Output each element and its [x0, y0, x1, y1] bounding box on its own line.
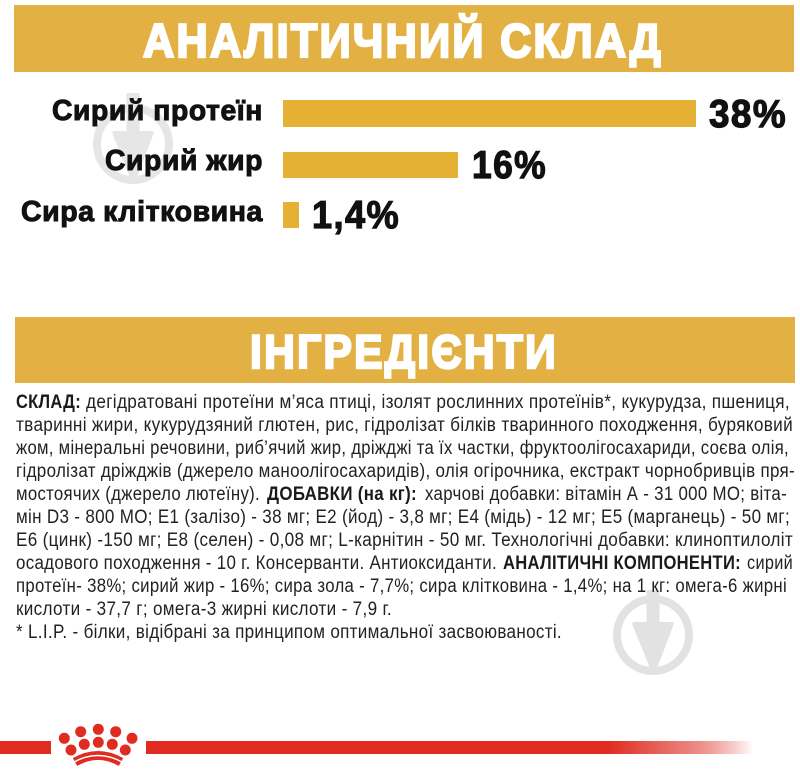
bar row: crude protein: 38% — [709, 93, 787, 136]
bar row: crude protein — [52, 93, 787, 136]
text block: ingredients list: мостоячих (джерело лютеїну). — [16, 484, 260, 505]
text block: ingredients list: ДОБАВКИ (на кг): — [267, 484, 417, 505]
heading banner: ingredients — [15, 317, 795, 383]
bar row: crude fibre: Сира клітковина — [21, 196, 263, 228]
bar row: crude fat — [105, 144, 547, 187]
heading banner: analytical composition — [14, 5, 794, 72]
bar row: crude fibre — [21, 194, 400, 237]
text block: ingredients list: АНАЛІТИЧНІ КОМПОНЕНТИ: — [503, 553, 741, 574]
bar row: crude protein: Сирий протеїн — [52, 95, 263, 127]
text block: ingredients list: сирий — [747, 553, 793, 574]
text block: ingredients list — [16, 392, 795, 643]
bar row: crude fat: 16% — [472, 144, 547, 187]
heading banner: ingredients: ІНГРЕДІЄНТИ — [250, 325, 558, 378]
bar row: crude fibre: 1,4% — [312, 194, 400, 237]
icon: royal crown logo — [59, 724, 138, 762]
text block: ingredients list: * L.I.P. - білки, відібрані за принципом оптимальної засвоюваності. — [16, 622, 562, 643]
icon: left download watermark — [97, 93, 169, 180]
panel: analytical composition — [14, 5, 794, 237]
icon: right download watermark — [617, 590, 689, 671]
heading banner: analytical composition: АНАЛІТИЧНИЙ СКЛАД — [143, 14, 663, 67]
footer: red brand stripe — [0, 741, 753, 754]
text block: ingredients list: осадового походження - 10 г. Консерванти. Антиоксиданти. — [16, 553, 497, 574]
text block: ingredients list: СКЛАД: — [16, 392, 81, 413]
bar row: crude fat: Сирий жир — [105, 145, 263, 177]
text block: ingredients list: кислоти - 37,7 г; омега-3 жирні кислоти - 7,9 г. — [16, 599, 392, 620]
